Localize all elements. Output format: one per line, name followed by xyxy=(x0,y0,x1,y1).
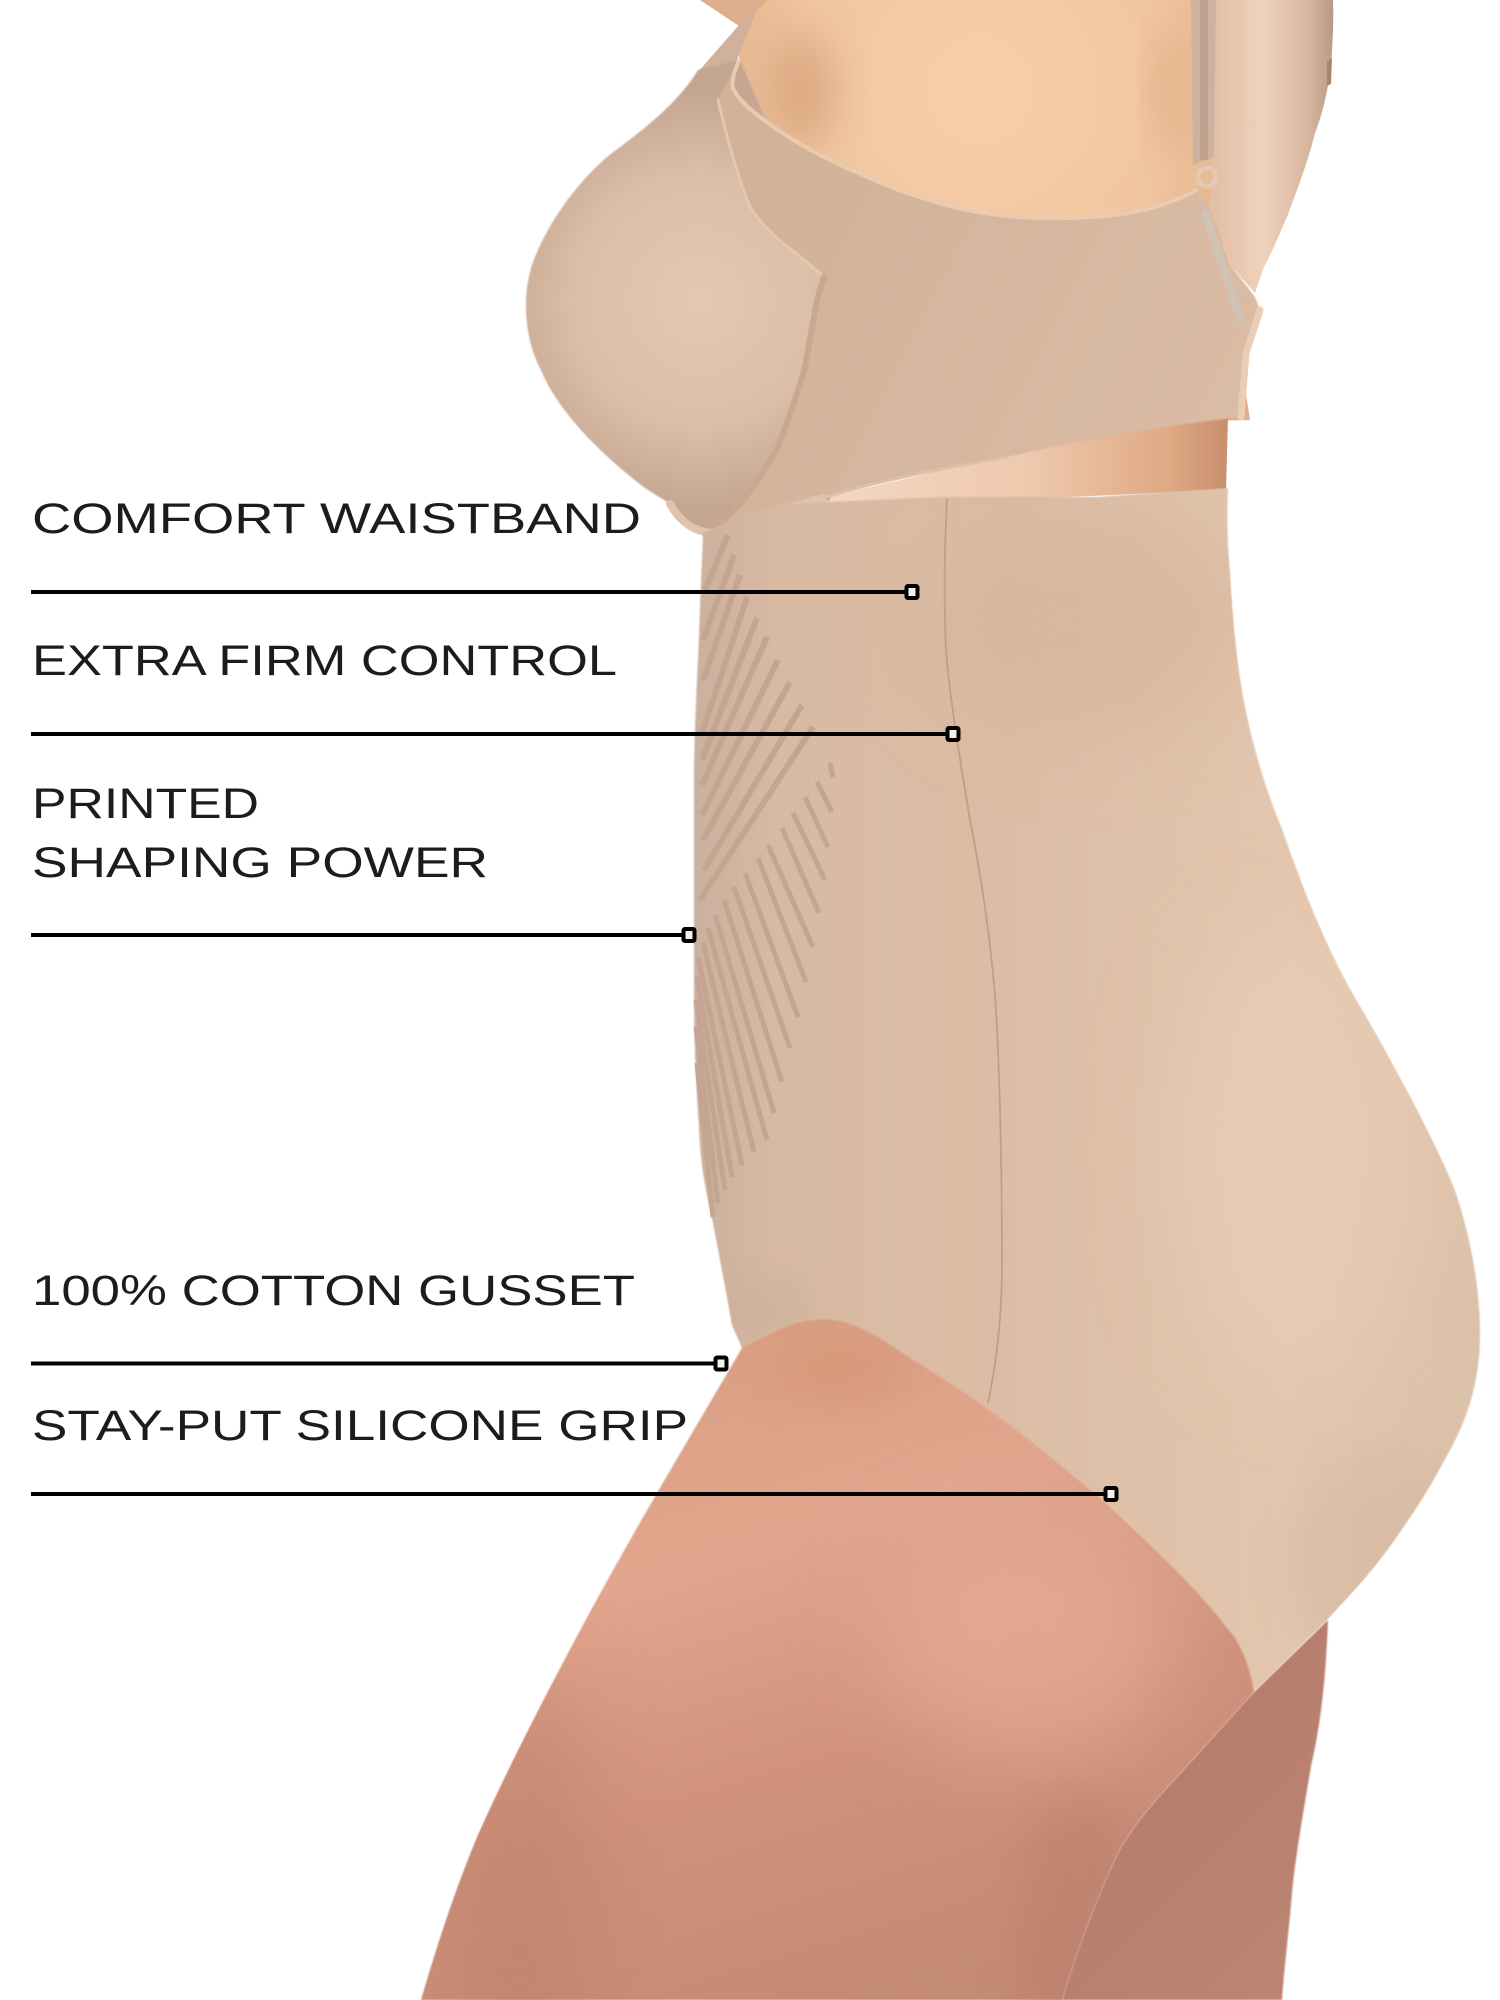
label: extra firm control: EXTRA FIRM CONTROL xyxy=(32,637,617,685)
bra band xyxy=(713,60,1260,533)
label: silicone grip: STAY-PUT SILICONE GRIP xyxy=(32,1402,688,1450)
upper torso skin xyxy=(700,0,1250,430)
brief shading xyxy=(1064,494,1442,1632)
callout: comfort waistband xyxy=(31,495,918,598)
brief centre seam xyxy=(945,498,1002,1403)
upper back panel xyxy=(1209,0,1333,293)
leader line: comfort waistband xyxy=(31,586,918,598)
printed shaping stripes: lower set xyxy=(696,763,833,1217)
callout: silicone grip xyxy=(31,1402,1116,1500)
label: comfort waistband: COMFORT WAISTBAND xyxy=(32,495,641,543)
leg shading xyxy=(450,1335,1180,2000)
product photo: model wearing shapewear xyxy=(421,0,1490,2000)
leader line: printed shaping power xyxy=(31,929,694,941)
callout: cotton gusset xyxy=(31,1267,726,1370)
callout: extra firm control xyxy=(31,637,958,740)
callout: printed shaping power xyxy=(31,780,694,941)
high-waist brief xyxy=(694,488,1480,1692)
waist gap skin xyxy=(790,417,1228,506)
front leg xyxy=(421,1250,1300,2000)
adjustable back strap and ring xyxy=(1191,0,1332,186)
leader line: cotton gusset xyxy=(31,1358,726,1370)
bra binding edges xyxy=(670,60,1260,533)
label: printed shaping power: SHAPING POWER xyxy=(32,839,488,887)
bra cup xyxy=(526,60,830,533)
leader line: silicone grip xyxy=(31,1488,1116,1500)
label: printed shaping power: PRINTED xyxy=(32,780,259,828)
leader line: extra firm control xyxy=(31,728,958,740)
printed shaping stripes: upper set xyxy=(700,535,813,900)
back leg xyxy=(1062,1620,1328,2000)
label: cotton gusset: 100% COTTON GUSSET xyxy=(32,1267,635,1315)
bra shoulder strap front xyxy=(698,10,757,100)
